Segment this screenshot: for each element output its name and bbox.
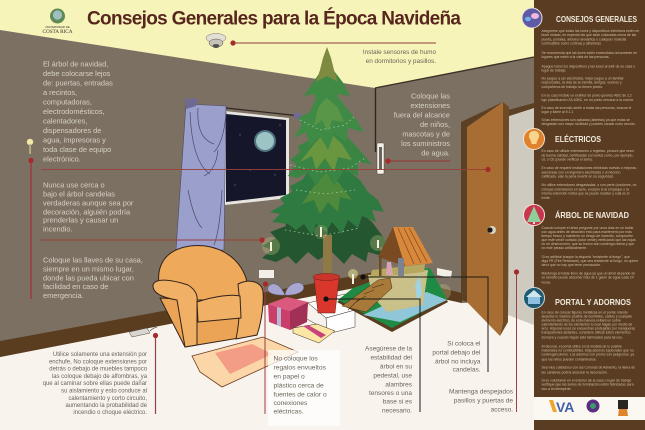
text: general tips: buen estado, en especial las que sean colocadas cerca de las <box>542 33 636 37</box>
text: extensions out of reach: Coloque las <box>411 92 450 100</box>
text: nativity and ornaments: Al decorar, el portal utilice en la medida de lo posible <box>542 344 622 348</box>
text: general tips: combustible como cortinas y alfombras. <box>542 42 602 46</box>
power strip on floor <box>129 327 157 337</box>
text: extensions out of reach: extensiones <box>411 101 450 110</box>
text: electrical: calificado, vale la pena invertir en su seguridad. <box>542 175 614 179</box>
callout: gifts <box>268 350 340 426</box>
text: general tips: No juegue a ser electricista, mejor pague a un familiar <box>542 76 625 80</box>
text: general tips: lugares que estén a la vista de las personas. <box>542 55 610 59</box>
text: tree stability: necesario. <box>382 408 412 414</box>
text: tree: no esté pelado artificialmente. <box>542 246 587 250</box>
text: tree: tiempo fresco y mantener un riesgo de incendio, compruebe <box>542 234 633 238</box>
text: electrical: coloque extensiones en serie, excepto si al empaque o la <box>542 187 629 191</box>
text: electrical: En caso de requerir instalaciones eléctricas nuevas o mejoras, <box>542 166 637 170</box>
text: nativity and ornaments: En caso de colocar figuras metálicas en el portal, intente <box>542 310 628 314</box>
text: keys: Coloque las llaves de su casa, <box>43 256 143 264</box>
text: general tips: Asegúrese que todas las luces y dispositivos eléctricos estén en <box>542 29 639 33</box>
text: tree stability: árbol en su <box>380 364 412 370</box>
text: nativity candles: portal debajo del <box>432 350 481 356</box>
text: candles warning: prenderlas y causar un <box>43 216 118 224</box>
text: general tips: Apague todos los dispositivos y las luces al salir de su casa o <box>542 64 635 68</box>
text: nativity and ornaments: las candelas podría alcanzar la decoración. <box>542 370 608 374</box>
text: general tips: Si las extensiones son apiladas (abiertas) ya que estas se <box>542 118 630 122</box>
flower pot <box>313 274 340 313</box>
text: tree: que esté verde cortado (color verde) verificando que las hojas <box>542 238 636 242</box>
text: nativity and ornaments: uso a la intemperie. <box>542 387 572 391</box>
text: tree placement: a recintos, <box>43 88 77 97</box>
logo: Universidad de Costa Rica: COSTA RICA <box>42 29 73 35</box>
text: tree stability: tensores o una <box>369 390 412 397</box>
text: extensions out of reach: mascotas y de <box>402 130 450 138</box>
text: tree: Mantenga el balde lleno de agua ya que un árbol depende de <box>542 272 635 276</box>
text: general tips: lugar de trabajo. <box>542 69 566 73</box>
text: tree: diga FR (Fire Retardant), que sea resistente al fuego, no quiere <box>542 259 638 263</box>
text: tree: no se desmoronen, que su tronco aún contenga resina y que <box>542 242 634 246</box>
text: extension cord use: enchufe, No coloque extensiones por <box>49 360 147 366</box>
text: tree stability: alambres <box>385 382 413 388</box>
text: extensions out of reach: los suministros <box>401 139 450 148</box>
text: general tips: kgs (clasificación 2A:10BC, en un punto cercano a la cocina. <box>542 98 634 102</box>
panel: tips sidebar <box>522 0 645 430</box>
text: extension cord use: su aislamiento y esto conduce al <box>61 388 147 394</box>
text: general tips: compañeros de trabajo no tienen precio. <box>542 85 603 89</box>
text: extensions out of reach: de niños, <box>420 120 450 129</box>
callout: gifts: en papel o <box>274 374 305 380</box>
text: tree stability: Asegúrese de la <box>365 346 412 352</box>
text: nativity candles: Si coloca el <box>447 340 481 348</box>
text: candles warning: decoración, alguién podría <box>43 208 131 216</box>
text: tree placement: debe colocarse lejos <box>43 69 111 78</box>
text: general tips: lugar y llame al 9-1-1 <box>542 110 574 114</box>
text: electrical: misma extensión indica que se puede realizar y cuál es el <box>542 192 630 196</box>
text: extension cord use: las coloque debajo de alfombras, ya <box>52 374 148 380</box>
text: tree placement: computadoras, <box>43 98 92 106</box>
icon: general tips <box>522 8 542 28</box>
text: nativity and ornaments: contengan plomo. Los adornos con plomo son peligrosos, ya <box>542 352 634 356</box>
gift boxes <box>268 283 335 343</box>
icon: tree <box>524 204 544 226</box>
text: nativity and ornaments: verifique que las series de iluminación estén fabricadas para <box>542 382 634 386</box>
text: general tips: desgastan con mayor facilidad y pueden causar corto circuito. <box>542 122 636 126</box>
text: tree stability: estabilidad del <box>370 354 413 362</box>
icon: house <box>524 288 544 308</box>
text: electrical: No utilice extensiones desgastadas, o con perte (cordones, no <box>542 183 637 187</box>
text: candles warning: Nunca use cerca o <box>43 180 105 190</box>
text: general tips: En su caso instale un extintor de polvo químico ABC de 2,2 <box>542 94 632 98</box>
text: extension cord use: que al caminar sobre ellas puede dañar <box>43 381 147 387</box>
text: tree placement: de: puertas, entradas <box>43 78 113 88</box>
callout: gifts: fuentes de calor o <box>274 392 327 398</box>
text: nativity candles: candelas. <box>453 366 481 374</box>
text: candles warning: incendio. <box>43 224 73 234</box>
text: tree placement: calentadores, <box>43 116 87 126</box>
chair left arm <box>153 280 197 347</box>
text: extension cord use: calentamiento y corto circuito, <box>68 396 147 402</box>
floor <box>0 260 534 430</box>
nativity scene <box>337 227 448 332</box>
callout: gifts: conexiones <box>274 400 308 407</box>
text: nativity candles: árbol no incluya <box>435 358 481 366</box>
text: clear hallways: acceso. <box>491 406 513 414</box>
text: extensions out of reach: fuera del alcance <box>394 110 450 120</box>
armchair <box>153 246 263 347</box>
text: tree placement: dispensadores de <box>43 126 101 135</box>
chair right arm <box>236 281 263 339</box>
text: tree placement: electrónico. <box>43 154 81 164</box>
text: tree stability: base si es <box>383 398 413 406</box>
text: general tips: puerta, portales, árboles navideños o cualquier material <box>542 37 626 41</box>
callout: gifts: No coloque los <box>274 356 318 362</box>
text: extension cord use: aumentando la probabilidad de <box>65 403 148 409</box>
callout: gifts: plástico cerca de <box>274 382 324 390</box>
power outlet strip on wall <box>377 143 384 174</box>
text: nativity and ornaments: materiales no combustibles. Elija adornos especiales que no <box>542 348 634 352</box>
text: clear hallways: pasillos y puertas de <box>454 398 513 404</box>
text: nativity and ornaments: Sea muy cuidadoso con las Coronas de Adviento, la llama de <box>542 366 635 370</box>
text: tree placement: agua, impresoras y <box>43 136 106 144</box>
text: nativity and ornaments: transparentes aislantes, considere utilizar estos elementos <box>542 330 631 334</box>
chair back <box>159 246 250 310</box>
text: electrical: UL o CE (puede verificar el sello). <box>542 158 593 162</box>
text: nativity and ornaments: que los niños pueden contaminarse. <box>542 358 597 362</box>
text: extension cord use: detrás o debajo de muebles tampoco <box>49 366 148 372</box>
text: smoke sensors: Instale sensores de humo <box>363 49 436 56</box>
text: electrical: de buena calidad, certificadas con sellos como, por ejemplo, <box>542 153 633 157</box>
text: keys: donde las pueda ubicar con <box>43 274 134 282</box>
text: keys: siempre en un mismo lugar, <box>43 264 134 274</box>
text: smoke sensors: en dormitorios y pasillos. <box>366 58 436 65</box>
text: keys: emergencia. <box>43 291 84 300</box>
text: extension cord use: incendio o choque eléctrico. <box>73 410 147 416</box>
logo: Universidad de Costa Rica: UNIVERSIDAD DE <box>45 25 70 29</box>
text: candles warning: bajo el árbol candelas <box>43 190 115 198</box>
text: general tips: responsable, la vida de su familia, amigos, vecinos y <box>542 81 622 85</box>
text: clear hallways: Mantenga despejados <box>449 388 514 396</box>
callout: gifts: regalos envueltos <box>274 364 327 372</box>
text: nativity and ornaments: calentamiento de los elementos lo cual hagan por medio de <box>542 322 632 326</box>
text: tree: con agua antes de decorarlo esto para mantenerlo por más <box>542 230 632 234</box>
text: tree: horas. <box>542 280 551 284</box>
candles <box>262 225 451 301</box>
smoke detector icon <box>206 34 226 48</box>
text: tree stability: pedestal, use <box>373 372 412 380</box>
text: extension cord use: Utilice solamente una extensión por <box>53 352 147 358</box>
text: nativity and ornaments: alejarlas lo máximo posible de bombillos, cables y cualquier <box>542 314 633 318</box>
heading: tree: ÁRBOL DE NAVIDAD <box>555 210 629 220</box>
text: electrical: asesórese con un ingeniero electricista o un técnico <box>542 170 621 174</box>
text: tree placement: toda clase de equipo <box>43 145 111 154</box>
heading: electrical: ELÉCTRICOS <box>555 134 601 144</box>
text: general tips: Se recomienda que las luces estén encendidas únicamente en <box>542 51 637 55</box>
text: electrical: En caso de utilizar extensiones o regletas, procure que sean <box>542 149 634 153</box>
chair seat cushion <box>197 295 241 322</box>
text: tree: decir que no hay que tener precaución. <box>542 263 601 267</box>
logo: Universidad de Costa Rica <box>42 8 73 35</box>
text: electrical: límite. <box>542 196 551 200</box>
text: tree placement: electrodomésticos, <box>43 107 105 116</box>
text: tree: Cuando compre el árbol pregunte por unos días en un balde <box>542 226 634 230</box>
text: nativity and ornaments: Si es voluntariar en el exterior de la casa o lugar de trabajo <box>542 378 631 382</box>
ceiling background <box>0 0 534 100</box>
chair body <box>160 298 262 347</box>
text: keys: facilidad en caso de <box>43 282 108 291</box>
heading: nativity and ornaments: PORTAL Y ADORNOS <box>555 298 631 307</box>
white pedestal <box>305 294 355 334</box>
logo strip <box>534 397 645 420</box>
text: tree: su tamaño puede absorber más de 1 galón de agua cada 24 <box>542 276 634 280</box>
icon: light bulb <box>524 128 544 150</box>
title: Consejos Generales para la Época Navideña <box>87 8 461 30</box>
text: extensions out of reach: de agua. <box>421 148 450 158</box>
window <box>225 108 301 205</box>
text: nativity and ornaments: arco. Algunas luces se encuentran protegidas por mangueras <box>542 326 635 330</box>
text: tree placement: El árbol de navidad, <box>43 60 108 68</box>
room walls <box>0 30 534 357</box>
text: tree: Si es artificial busque la etiqueta "resistente al fuego", que <box>542 255 630 259</box>
door <box>461 102 534 336</box>
text: general tips: En caso de incendio alerte a todas las personas, evacue el <box>542 106 632 110</box>
text: candles warning: verdaderas aunque sea por <box>43 198 134 208</box>
red and black callout lines <box>28 40 519 414</box>
callout: gifts: eléctricas. <box>274 408 304 416</box>
curtain <box>176 98 226 250</box>
rug <box>192 337 298 387</box>
logo strip: VA <box>556 399 574 415</box>
christmas tree <box>262 47 392 280</box>
text: nativity and ornaments: elemento eléctrico, de esta manera evitará un sobre <box>542 318 621 322</box>
icon: key <box>27 139 33 154</box>
wall outlets <box>259 268 452 278</box>
text: nativity and ornaments: siempre y cuando hayan sido fabricados para tal uso. <box>542 336 623 340</box>
